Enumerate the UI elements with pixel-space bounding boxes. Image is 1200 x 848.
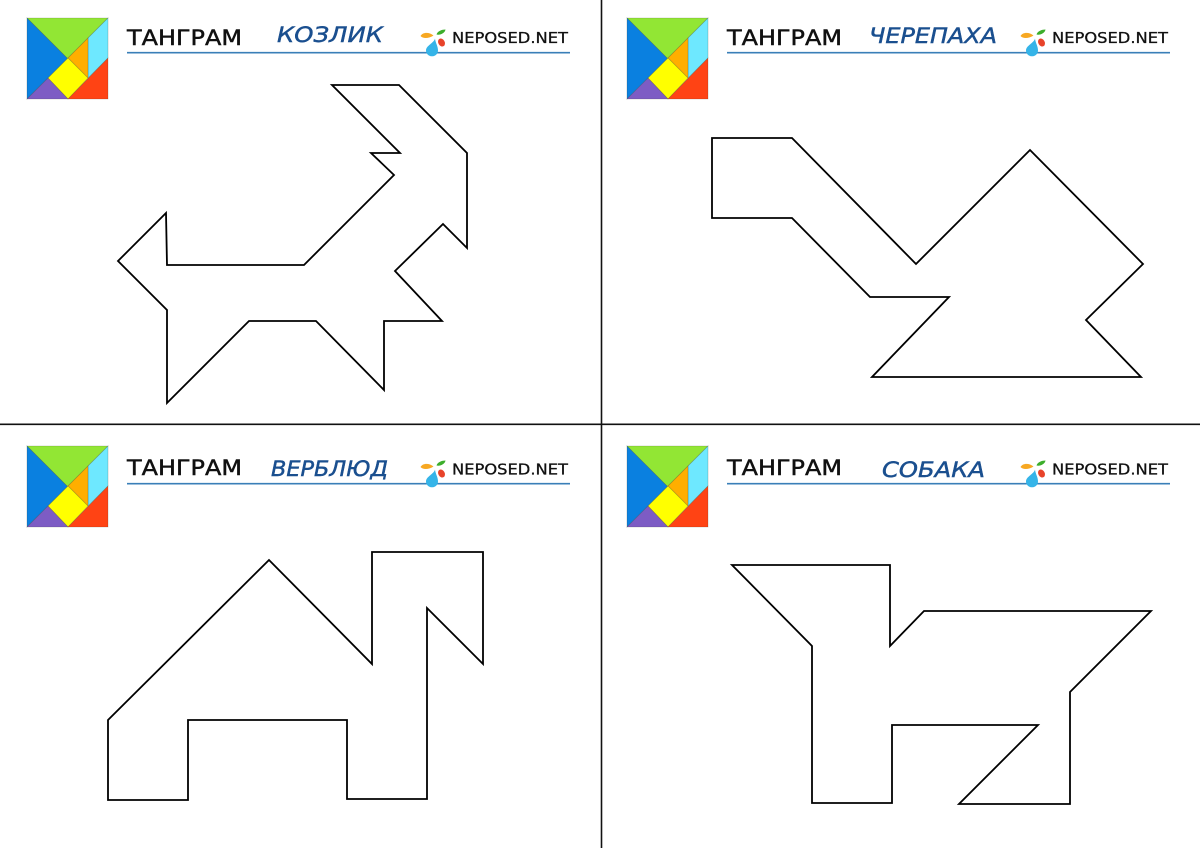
brand name: NEPOSED.NET xyxy=(1052,29,1169,47)
panel: camel xyxy=(27,446,570,800)
dog outline xyxy=(732,565,1151,804)
goat outline xyxy=(118,85,467,403)
icon: logo drops xyxy=(420,460,446,487)
heading: dog: СОБАКА xyxy=(882,458,985,482)
panel: goat xyxy=(27,18,570,403)
heading: tangram: ТАНГРАМ xyxy=(726,456,842,480)
heading: camel: ВЕРБЛЮД xyxy=(271,457,388,481)
brand name: NEPOSED.NET xyxy=(452,29,569,47)
header rule xyxy=(727,52,1170,54)
heading: tangram: ТАНГРАМ xyxy=(126,456,242,480)
icon: tangram square xyxy=(27,18,108,99)
heading: turtle: ЧЕРЕПАХА xyxy=(869,24,997,48)
icon: logo drops xyxy=(420,30,446,56)
panel: turtle xyxy=(627,18,1170,377)
heading: tangram: ТАНГРАМ xyxy=(126,26,242,50)
header rule xyxy=(727,483,1170,485)
panel: dog xyxy=(627,446,1170,804)
heading: tangram: ТАНГРАМ xyxy=(726,26,842,50)
icon: tangram square xyxy=(627,446,708,527)
camel outline xyxy=(108,552,483,800)
turtle outline xyxy=(712,138,1143,377)
icon: logo drops xyxy=(1020,460,1046,487)
icon: tangram square xyxy=(27,446,108,527)
heading: goat: КОЗЛИК xyxy=(277,23,384,47)
brand name: NEPOSED.NET xyxy=(452,460,569,478)
icon: tangram square xyxy=(627,18,708,99)
brand name: NEPOSED.NET xyxy=(1052,460,1169,478)
header rule xyxy=(127,483,570,485)
header rule xyxy=(127,52,570,54)
icon: logo drops xyxy=(1020,30,1046,56)
